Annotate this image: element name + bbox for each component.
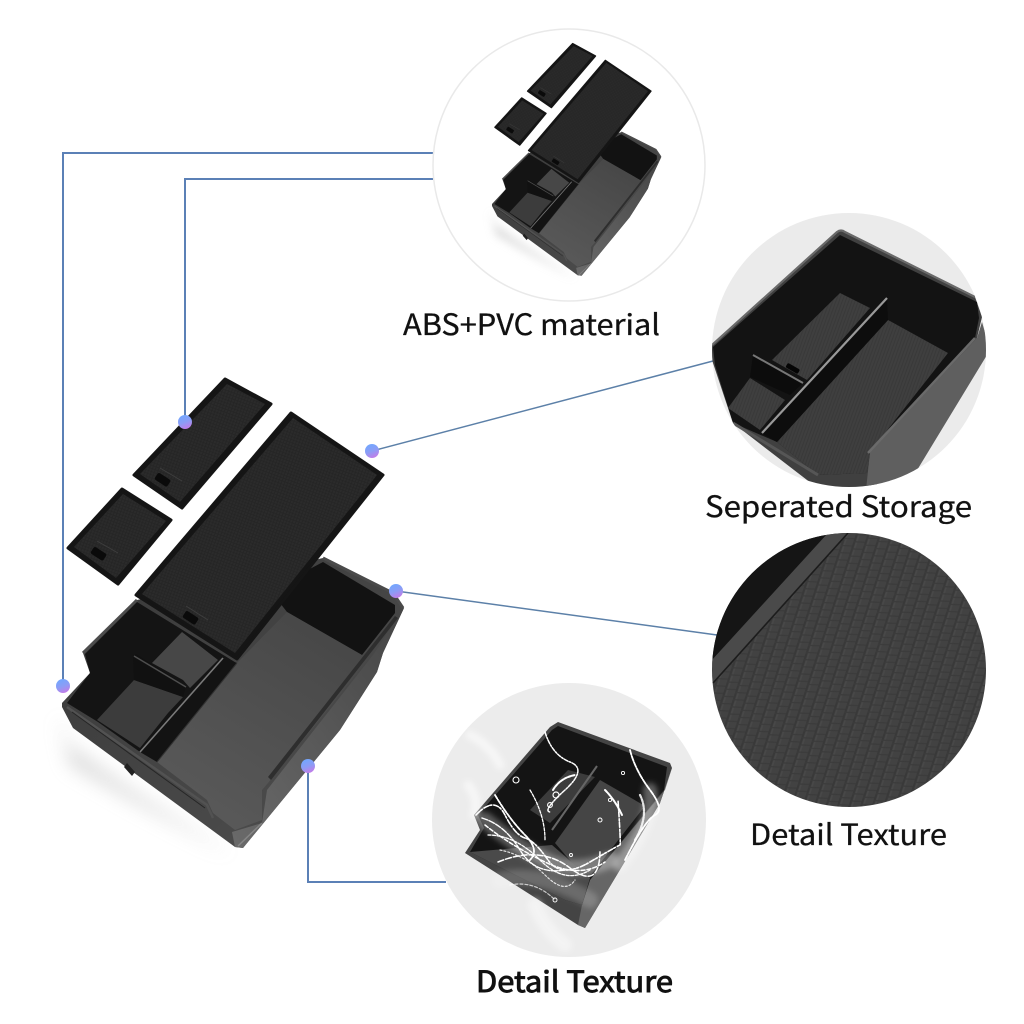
heading: Seperated Storage: Seperated Storage: [705, 484, 972, 526]
connector line: tray corner to texture circle: [396, 591, 717, 635]
marker dots on the product: [56, 415, 403, 773]
connector line: tray side to waterproof circle: [308, 766, 446, 882]
splash: [468, 732, 659, 945]
panel: waterproof circle: [432, 683, 706, 957]
connector line: large lid to separated storage circle: [372, 361, 713, 451]
icon: tray close-up top view: [712, 230, 990, 490]
icon: tray with water splash: [465, 722, 672, 945]
heading: Detail Texture (right): Detail Texture: [750, 812, 947, 854]
connector line: small lid to ABS+PVC circle: [185, 179, 433, 422]
heading: Detail Texture (bottom): Detail Texture: [476, 959, 673, 1001]
panel: separated storage circle: [712, 213, 990, 490]
connector line: top-left long line to ABS+PVC circle: [63, 153, 433, 686]
icon: surface edge corner: [712, 533, 848, 684]
panel: detail texture circle: [700, 520, 986, 807]
icon: miniature exploded tray: [490, 44, 661, 279]
heading: ABS+PVC material: ABS+PVC material: [403, 302, 660, 344]
main product: tray with lids: [58, 379, 404, 855]
panel: ABS+PVC material circle: [433, 29, 705, 301]
